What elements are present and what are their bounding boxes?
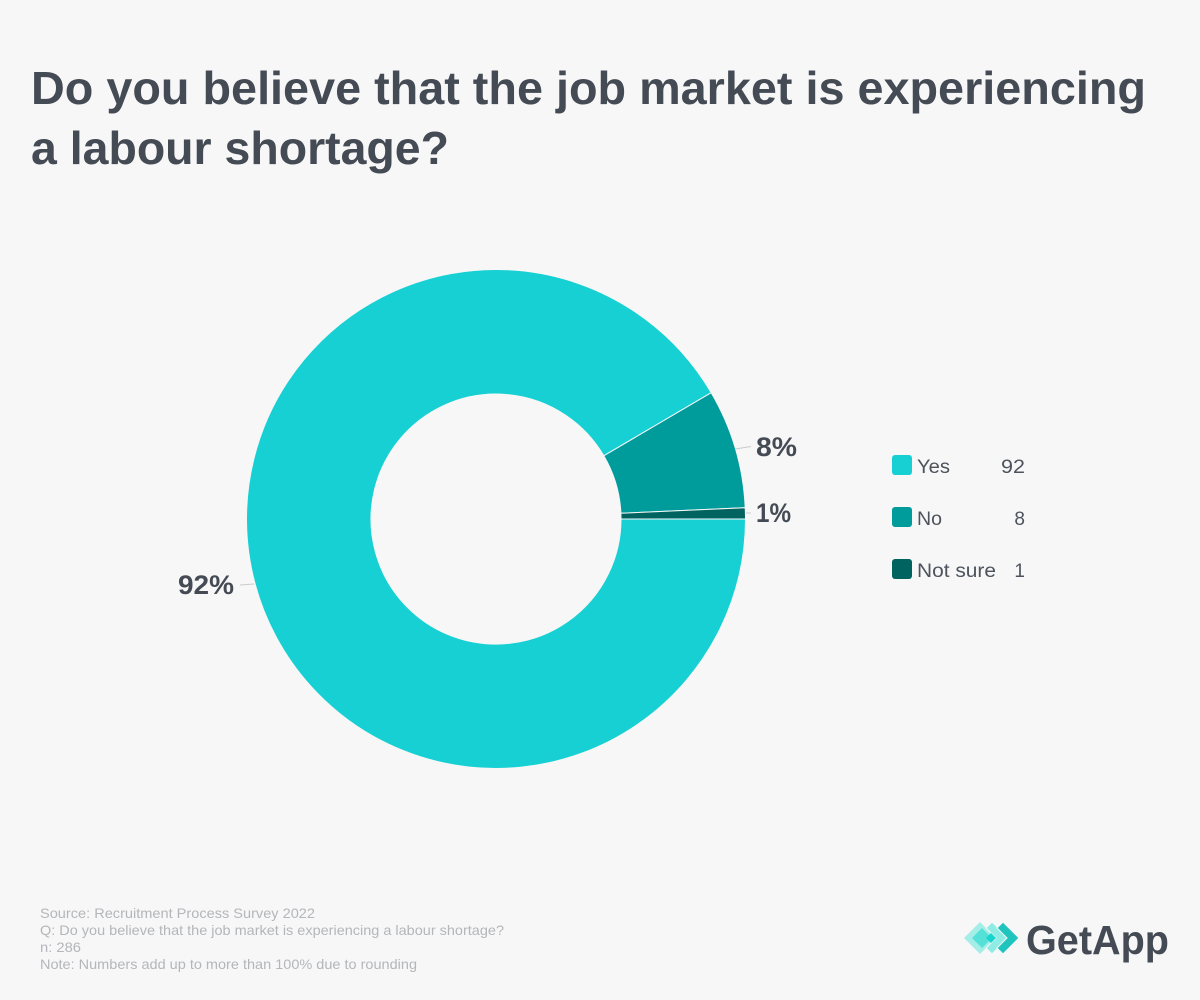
slice: Yes 92% — [247, 269, 746, 768]
logo: GetApp — [964, 917, 1169, 963]
title: a labour shortage? — [31, 122, 449, 174]
legend — [892, 455, 1025, 582]
label: 1%: 1% — [756, 498, 791, 528]
leader lines — [240, 446, 751, 585]
label: 8%: 8% — [756, 432, 797, 462]
legend: Yes — [892, 455, 1025, 478]
legend: Yes: Yes — [917, 457, 950, 478]
footnotes: Q: Do you believe that the job market is experiencing a labour shortage? — [40, 922, 504, 938]
slice: No 8% — [604, 393, 745, 513]
label: 92%: 92% — [178, 570, 234, 600]
wordmark: GetApp — [1026, 917, 1169, 963]
footnotes: Source: Recruitment Process Survey 2022 — [40, 905, 315, 921]
legend: Not sure: 1 — [1014, 561, 1025, 582]
slice: Not sure 1% — [621, 508, 746, 519]
icon: diamonds — [964, 922, 1019, 954]
legend: No: No — [917, 509, 942, 530]
legend: Not sure — [892, 559, 1025, 582]
legend: No: 8 — [1014, 509, 1025, 530]
data labels — [178, 432, 797, 600]
title: Do you believe that the job market is experiencing — [31, 62, 1146, 114]
title — [31, 62, 1146, 174]
footnotes: n: 286 — [40, 939, 81, 955]
legend: No — [892, 507, 1025, 530]
legend: Not sure: Not sure — [917, 561, 996, 582]
footnotes — [40, 905, 504, 972]
legend: Yes: 92 — [1001, 457, 1025, 478]
donut chart — [247, 269, 746, 768]
footnotes: Note: Numbers add up to more than 100% due to rounding — [40, 956, 417, 972]
